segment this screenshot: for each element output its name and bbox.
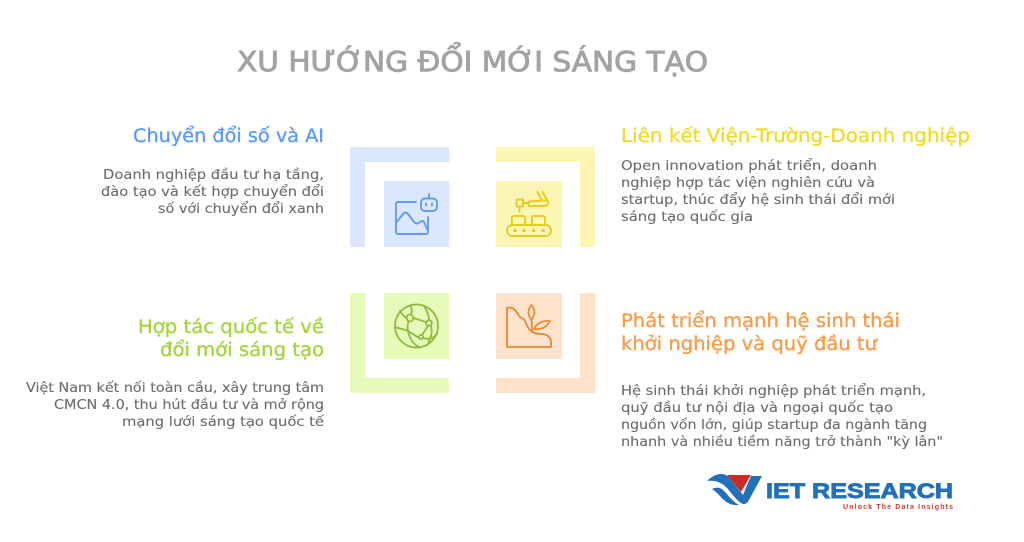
text block: khởi nghiệp: nguồn vốn lớn, giúp startup đa ngành tăng bbox=[621, 416, 927, 433]
text block: chuyển đổi số: số với chuyển đổi xanh bbox=[158, 200, 324, 217]
panel: khởi nghiệp text bbox=[621, 311, 943, 450]
text block: chuyển đổi số bbox=[101, 167, 324, 217]
title: XU HƯỚNG ĐỔI MỚI SÁNG TẠO bbox=[237, 41, 708, 78]
panel: chuyển đổi số và AI text bbox=[101, 126, 324, 217]
text block: hợp tác quốc tế: Việt Nam kết nối toàn cầu, xây trung tâm bbox=[26, 379, 324, 396]
heading: khởi nghiệp: Phát triển mạnh hệ sinh thái bbox=[621, 311, 900, 332]
text block: hợp tác quốc tế bbox=[26, 379, 325, 430]
text block: liên kết: Open innovation phát triển, doanh bbox=[621, 157, 877, 174]
text block: liên kết: sáng tạo quốc gia bbox=[621, 208, 753, 225]
text block: liên kết: startup, thúc đẩy hệ sinh thái đổi mới bbox=[621, 191, 895, 208]
text block: khởi nghiệp: Hệ sinh thái khởi nghiệp phát triển mạnh, bbox=[621, 382, 926, 399]
heading: hợp tác quốc tế: đổi mới sáng tạo bbox=[160, 340, 324, 361]
text block: hợp tác quốc tế: mạng lưới sáng tạo quốc tế bbox=[122, 413, 325, 430]
text block: liên kết: nghiệp hợp tác viện nghiên cứu và bbox=[621, 175, 875, 191]
text block: chuyển đổi số: Doanh nghiệp đầu tư hạ tầng, bbox=[103, 167, 324, 183]
panel: yellow corner block bbox=[496, 147, 595, 247]
heading: liên kết: Liên kết Viện-Trường-Doanh nghiệp bbox=[621, 126, 970, 147]
icon: plant on hill bbox=[507, 305, 551, 347]
text block: chuyển đổi số: đào tạo và kết hợp chuyển đổi bbox=[101, 183, 324, 200]
text block: hợp tác quốc tế: CMCN 4.0, thu hút đầu tư và mở rộng bbox=[54, 397, 324, 413]
panel: liên kết text bbox=[621, 126, 970, 225]
icon: globe network bbox=[395, 304, 438, 348]
panel: green corner block bbox=[350, 293, 449, 393]
heading: hợp tác quốc tế: Hợp tác quốc tế về bbox=[138, 317, 324, 338]
text block: khởi nghiệp bbox=[621, 382, 943, 450]
heading: khởi nghiệp: khởi nghiệp và quỹ đầu tư bbox=[621, 334, 878, 355]
panel: blue corner block bbox=[350, 147, 449, 247]
heading: chuyển đổi số: Chuyển đổi số và AI bbox=[133, 126, 324, 147]
heading: hợp tác quốc tế bbox=[138, 317, 324, 361]
panel: hợp tác quốc tế text bbox=[26, 317, 325, 430]
text block: khởi nghiệp: quỹ đầu tư nội địa và ngoại quốc tạo bbox=[621, 399, 893, 416]
panel: orange corner block bbox=[496, 293, 595, 393]
text block: liên kết bbox=[621, 157, 895, 225]
heading: khởi nghiệp bbox=[621, 311, 900, 355]
logo wordmark: IET RESEARCH bbox=[766, 479, 953, 503]
logo tagline: Unlock The Data Insights bbox=[843, 504, 953, 511]
icon: image with robot bbox=[396, 194, 437, 234]
icon: robot arm and conveyor bbox=[507, 192, 551, 236]
logo: Viet Research bbox=[707, 474, 953, 511]
text block: khởi nghiệp: nhanh và nhiều tiềm năng trở thành "kỳ lân" bbox=[621, 433, 943, 450]
icon: logo mark bbox=[707, 474, 762, 505]
